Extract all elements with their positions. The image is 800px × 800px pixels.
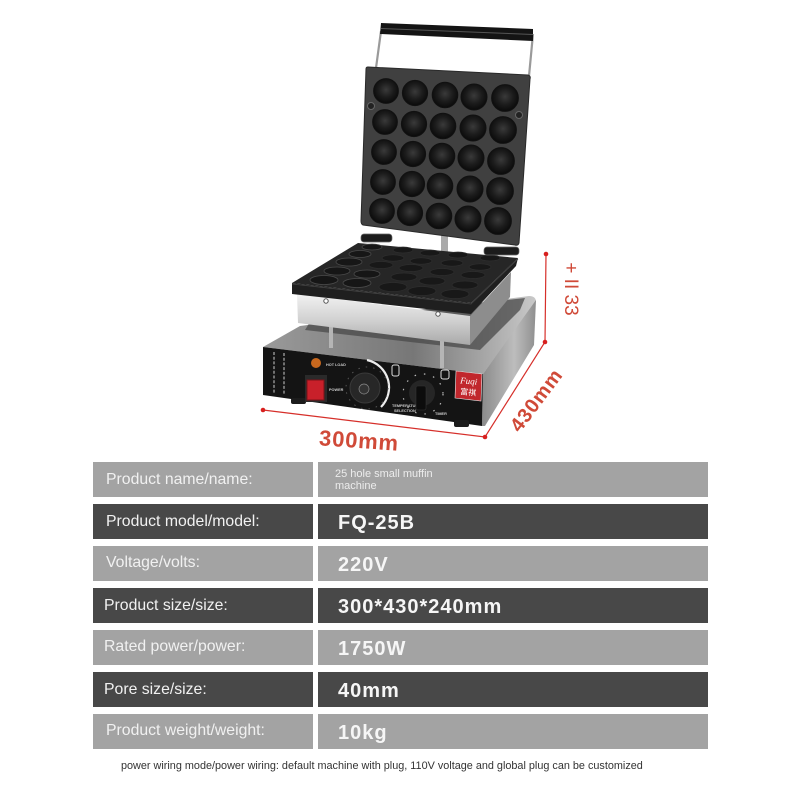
dimension label: height: + II 33 xyxy=(560,262,581,316)
thermometer icon xyxy=(392,365,399,376)
row: weight value: 10kg xyxy=(338,722,388,744)
red Fuqi logo: Fuqi xyxy=(459,375,478,387)
black control panel: TEMPERATURE xyxy=(392,404,421,408)
row: voltage value xyxy=(318,546,708,581)
red power switch xyxy=(305,375,327,402)
support legs xyxy=(329,322,444,368)
black control panel: TIMER xyxy=(435,412,447,416)
row: pore size value: 40mm xyxy=(338,680,400,702)
row: model label xyxy=(93,504,313,539)
row: rated power value: 1750W xyxy=(338,638,406,660)
black control panel: HOT LOAD xyxy=(326,363,346,367)
row: pore size label: Pore size/size: xyxy=(104,681,207,698)
row: product name value xyxy=(318,462,708,497)
row: model label: Product model/model: xyxy=(106,513,260,530)
row: size value: 300*430*240mm xyxy=(338,596,502,618)
hinges xyxy=(361,234,519,255)
red Fuqi logo xyxy=(455,371,482,401)
row: pore size value xyxy=(318,672,708,707)
dimension label: 300mm: 300mm xyxy=(318,425,400,456)
base side panel xyxy=(482,300,536,426)
row: product name value: 25 hole small muffin machine xyxy=(335,468,433,492)
dimension label: 430mm: 430mm xyxy=(506,365,568,436)
product illustration: waffle machine with dimensions xyxy=(260,23,581,456)
row: size label xyxy=(93,588,313,623)
upper cooking plate with 25 holes xyxy=(361,67,530,245)
base top surface xyxy=(263,296,536,374)
row: rated power label: Rated power/power: xyxy=(104,638,245,655)
scale columns xyxy=(274,352,284,394)
footnote: power wiring mode/power wiring: default machine with plug, 110V voltage and global plug can be customized xyxy=(121,760,643,772)
row: rated power value xyxy=(318,630,708,665)
red Fuqi logo: 富祺 xyxy=(460,386,477,399)
row: rated power label xyxy=(93,630,313,665)
shadow under heating block xyxy=(305,298,525,350)
row: voltage label xyxy=(93,546,313,581)
lower cooking plate xyxy=(292,243,518,314)
black control panel: SELECTION xyxy=(394,409,416,413)
stainless support post xyxy=(441,235,448,257)
black control panel: POWER xyxy=(329,388,344,392)
black control panel xyxy=(263,347,483,427)
timer knob xyxy=(403,374,443,414)
clock icon xyxy=(441,370,449,379)
row: weight label: Product weight/weight: xyxy=(106,722,265,739)
temperature knob xyxy=(346,360,389,409)
handle xyxy=(376,23,533,76)
row: weight label xyxy=(93,714,313,749)
row: pore size label xyxy=(93,672,313,707)
row: weight value xyxy=(318,714,708,749)
red dimension lines xyxy=(261,252,548,439)
row: size value xyxy=(318,588,708,623)
row: model value xyxy=(318,504,708,539)
row: voltage value: 220V xyxy=(338,554,389,576)
row: size label: Product size/size: xyxy=(104,597,228,614)
row: product name label: Product name/name: xyxy=(106,471,253,488)
feet xyxy=(291,398,469,427)
row: product name label xyxy=(93,462,313,497)
indicator lamp xyxy=(311,358,321,368)
row: voltage label: Voltage/volts: xyxy=(106,554,200,571)
row: model value: FQ-25B xyxy=(338,512,415,534)
stainless heating block xyxy=(297,272,511,345)
